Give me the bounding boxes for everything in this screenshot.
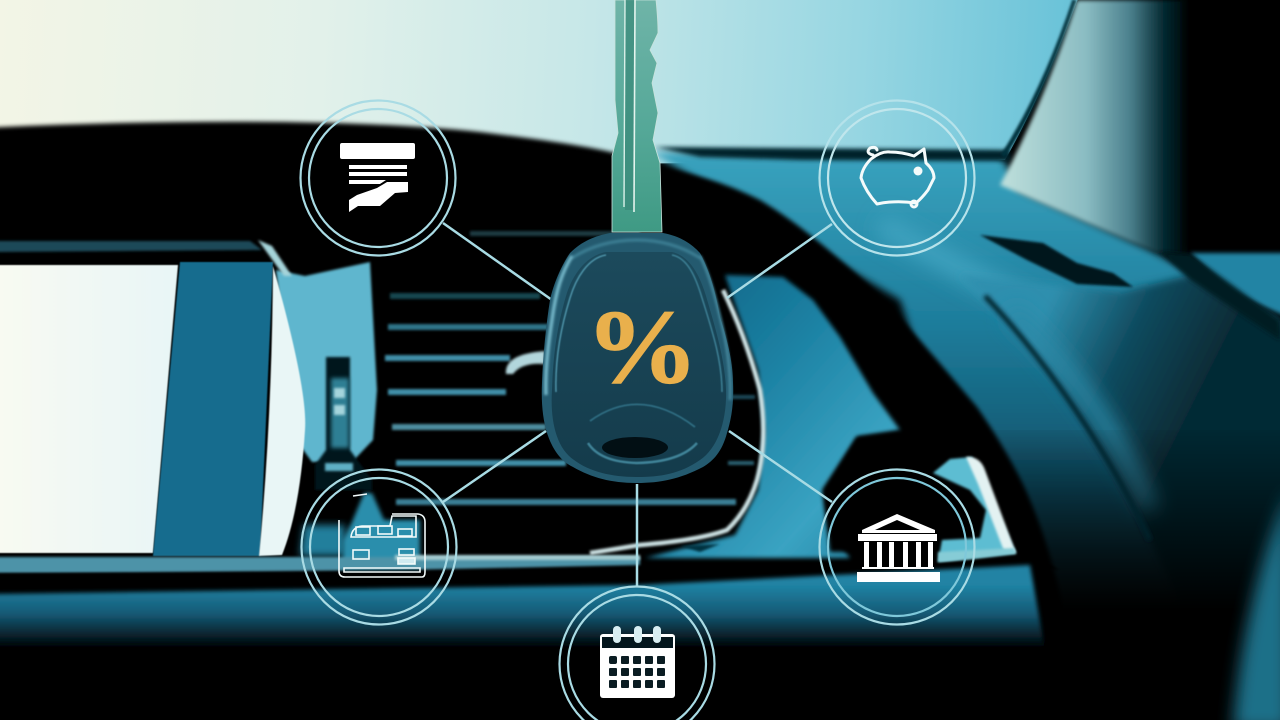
switch slot — [315, 357, 372, 490]
fob hole — [602, 437, 668, 458]
icon: calculator — [339, 494, 425, 577]
lit panel in lower left — [300, 525, 345, 556]
bank circle black backdrop — [822, 432, 985, 552]
percent sign: % — [586, 288, 698, 405]
blue band — [153, 262, 273, 556]
dark bumps below trim — [680, 544, 720, 552]
icon circle: documents in hand — [300, 100, 456, 256]
far right teal — [1233, 490, 1280, 720]
icon circle: calendar — [560, 586, 714, 720]
left housing top — [0, 241, 262, 252]
fob arc — [590, 404, 695, 427]
black dash hood — [0, 122, 1075, 720]
icon circle: piggy bank — [820, 100, 974, 256]
upper dashboard and right surface — [650, 152, 1280, 720]
highlight streak — [880, 225, 1060, 322]
key blade — [612, 0, 662, 232]
lower right fade — [990, 430, 1280, 720]
screen — [0, 265, 178, 553]
connector lines — [443, 223, 832, 586]
right side ledge — [1190, 253, 1280, 318]
icon: calendar — [600, 626, 675, 698]
fob hole ring — [588, 443, 697, 463]
car key — [542, 0, 733, 483]
windshield — [0, 0, 1085, 170]
teal area beside vent — [645, 275, 900, 558]
icon: piggy bank — [861, 147, 934, 207]
right trim triangle — [933, 457, 1016, 562]
key fob — [542, 233, 733, 483]
lower dashboard band — [0, 565, 1045, 650]
vent white trim — [590, 290, 763, 553]
icon circle: bank — [820, 470, 974, 624]
dark line under windshield — [655, 147, 1010, 161]
lower vent light strip — [0, 557, 640, 574]
white crescent — [259, 266, 305, 556]
icon circle: calculator and papers — [302, 470, 456, 624]
icon: bank building — [857, 514, 940, 582]
dark groove — [985, 296, 1150, 540]
dark slot — [980, 235, 1133, 287]
light side panel — [276, 262, 377, 462]
vent slats — [385, 231, 755, 505]
bright edge next to groove — [1010, 312, 1150, 510]
black gap above lower band — [0, 560, 1060, 594]
pillar — [1000, 0, 1192, 255]
icon: document and hand — [340, 143, 415, 212]
pillar shadow line — [1003, 0, 1075, 156]
right dashboard section — [960, 275, 1280, 720]
